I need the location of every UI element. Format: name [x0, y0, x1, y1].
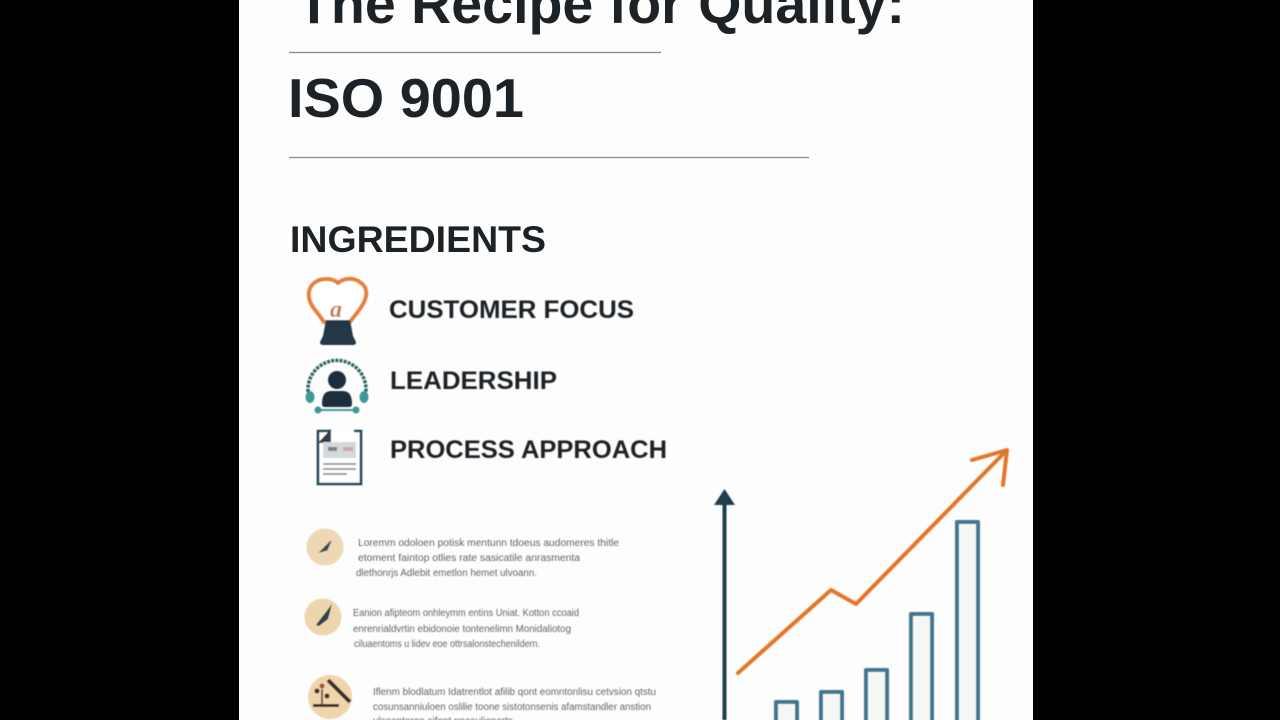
bars — [776, 522, 978, 720]
title: ISO 9001 — [288, 67, 524, 129]
icon: heart bulb: a — [330, 297, 342, 323]
page panel — [239, 0, 1033, 720]
chart: rising bars and trend arrow — [714, 450, 1007, 720]
title — [288, 0, 905, 158]
icon: document — [318, 429, 361, 484]
note 3 — [308, 675, 656, 720]
note 2: Eanion afipteom onhleymm entins Uniat. Kotton ccoaid — [353, 608, 579, 619]
heading: ingredients: INGREDIENTS — [290, 219, 546, 260]
ingredient: customer focus: CUSTOMER FOCUS — [389, 296, 634, 324]
note 1: dlethonrjs Adlebit emetlon hemet ulvoann. — [356, 568, 537, 579]
icon: heart bulb — [309, 279, 366, 345]
note 2: ciluaentoms u lidev eoe ottrsalonstechenildern. — [354, 639, 540, 650]
ingredient: process approach — [318, 429, 667, 484]
icon: plant and slope badge — [308, 675, 352, 719]
note 1: Loremm odoloen potisk mentunn tdoeus audomeres thitle — [358, 538, 619, 549]
ingredient: leadership: LEADERSHIP — [390, 367, 557, 395]
trend arrow — [738, 450, 1007, 673]
note 2 — [304, 598, 579, 650]
note 3: Iflenm blodlatum Idatrentlot afilib qont eomntonlisu cetvsion qtstu — [373, 687, 656, 698]
icon: pencil badge — [306, 528, 344, 566]
ingredient: process approach: PROCESS APPROACH — [390, 436, 667, 464]
icon: leader in wreath — [306, 360, 368, 414]
note 1: etoment faintop otlies rate sasicatile anrasmenta — [358, 553, 580, 564]
icon: wedge badge — [304, 598, 342, 636]
note 3: cosunsanniuloen oslilie toone sistotonsenis afamstandler anstion — [373, 702, 651, 713]
note 1 — [306, 528, 619, 579]
ingredient: leadership — [306, 360, 557, 414]
note 2: enrenrialdvrtin ebidonoie tontenelimn Monidaliotog — [353, 624, 571, 635]
y axis arrow — [714, 489, 735, 720]
ingredient: customer focus — [309, 279, 634, 345]
